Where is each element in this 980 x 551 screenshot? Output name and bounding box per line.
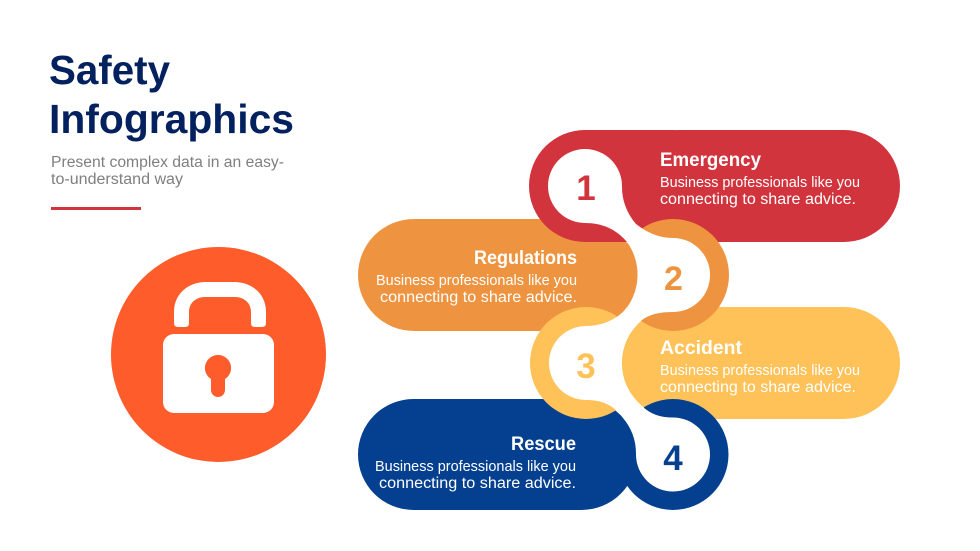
text: rescue: Rescue [511,434,576,455]
number 4: 4 [663,439,683,478]
title underline [51,207,141,210]
ring 1 [529,130,641,242]
text: emergency [660,150,860,208]
step diagram [358,130,900,510]
emergency band fill [585,130,675,242]
title: Infographics [49,96,294,142]
subtitle [51,154,284,188]
text: rescue: Business professionals like you [375,458,576,475]
ring 3 [530,307,642,419]
panel: rescue band [358,399,637,510]
title [49,47,294,142]
icon: padlock in circle [111,247,326,462]
text: accident: Business professionals like you [660,362,860,379]
text: rescue: connecting to share advice. [379,475,576,492]
ring 4 [618,399,728,510]
text: regulations: connecting to share advice. [380,289,577,306]
panel: accident band [622,307,900,419]
ring 2 [617,219,729,331]
text: rescue [375,434,576,492]
panel: emergency band [622,130,900,242]
text: accident: connecting to share advice. [660,379,856,396]
text: regulations: Regulations [474,248,577,269]
text: emergency: connecting to share advice. [660,191,856,208]
number 1: 1 [576,169,596,208]
text: regulations: Business professionals like you [376,272,577,289]
subtitle: to-understand way [51,171,183,188]
white connecting S-curve [548,149,710,492]
text: accident: Accident [660,338,743,359]
panel: regulations band [358,219,637,331]
number 3: 3 [576,347,596,386]
text: emergency: Business professionals like you [660,174,860,191]
text: regulations [376,248,577,306]
text: emergency: Emergency [660,150,761,171]
number 2: 2 [664,260,683,298]
title: Safety [49,47,170,93]
text: accident [660,338,860,396]
subtitle: Present complex data in an easy- [51,154,284,171]
